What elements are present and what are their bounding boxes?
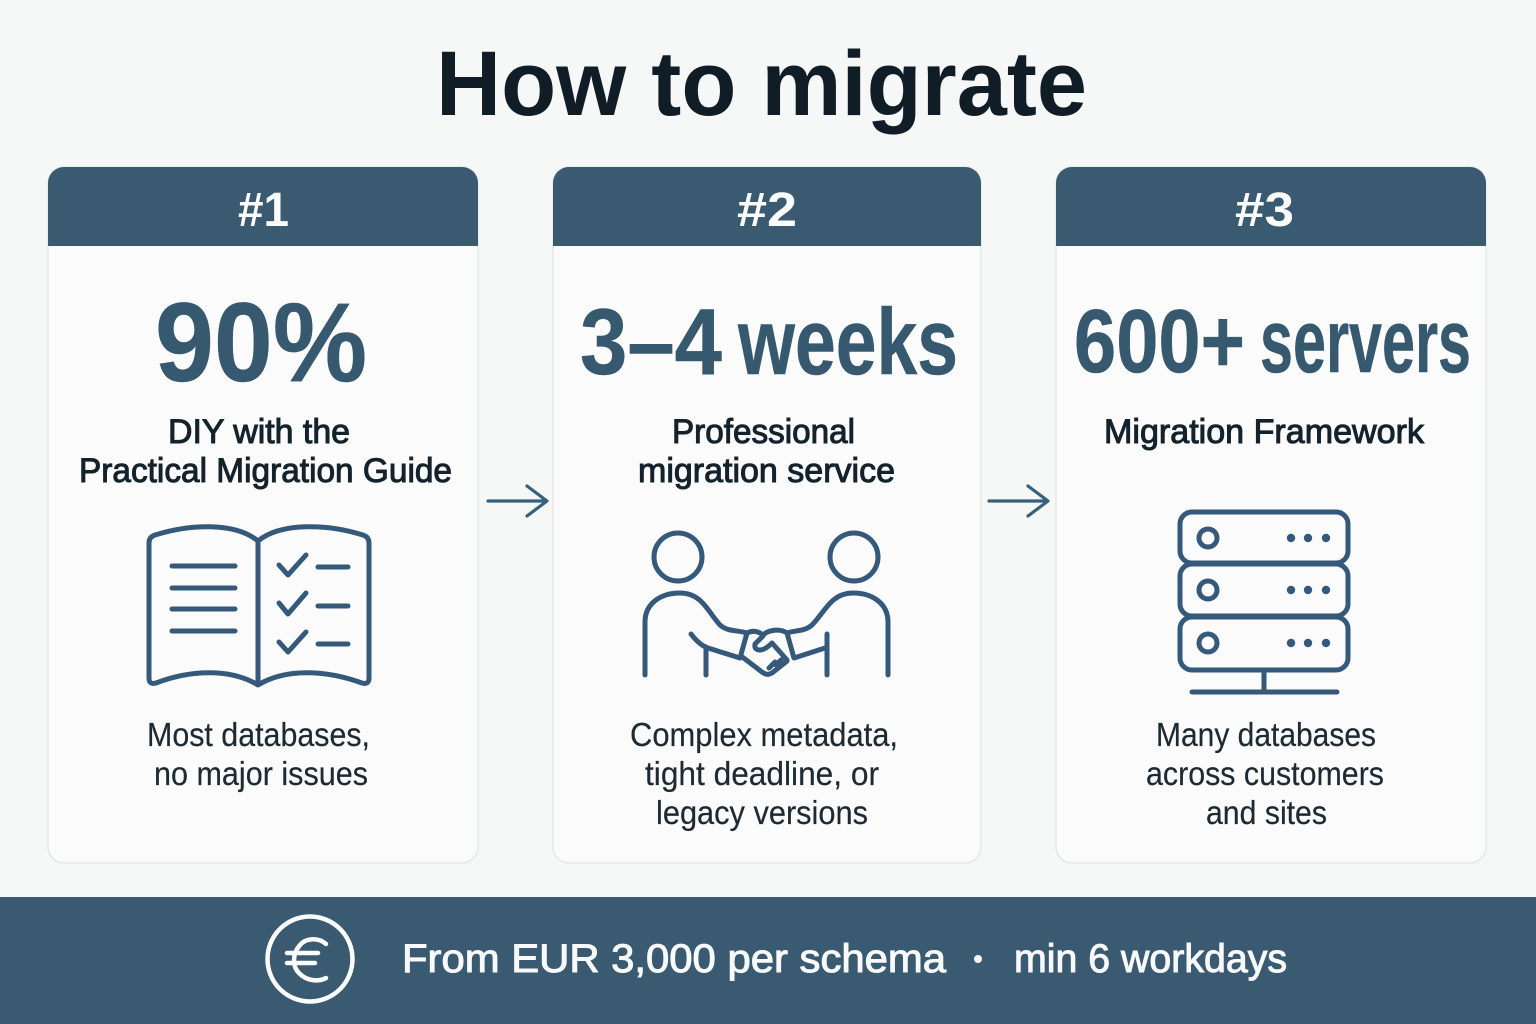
stat 3-4 weeks bbox=[580, 289, 958, 394]
title: How to migrate bbox=[436, 33, 1087, 135]
subtitle 2: Professional bbox=[672, 413, 855, 451]
header number 2: #2 bbox=[737, 184, 797, 237]
arrow 2 to 3 bbox=[989, 486, 1048, 516]
icon: server rack bbox=[1180, 512, 1348, 692]
subtitle 3: Migration Framework bbox=[1104, 413, 1425, 451]
header bar 2 bbox=[553, 167, 981, 246]
duration text: min 6 workdays bbox=[1014, 937, 1287, 981]
icon: open book with checklist bbox=[149, 527, 369, 685]
description 3: across customers bbox=[1146, 755, 1384, 792]
stat 3-4 weeks: 3–4 bbox=[580, 289, 722, 394]
description 1 bbox=[147, 716, 370, 792]
subtitle 2 bbox=[638, 413, 895, 490]
card background 3 bbox=[1056, 167, 1486, 863]
header bar 1 bbox=[48, 167, 478, 246]
header number 1: #1 bbox=[238, 184, 289, 237]
footer background bbox=[0, 897, 1536, 1024]
icon: handshake bbox=[645, 533, 888, 675]
stat 90%: 90% bbox=[155, 280, 367, 405]
description 2: Complex metadata, bbox=[630, 716, 898, 753]
icon: euro coin bbox=[268, 916, 352, 1002]
arrow 1 to 2 bbox=[488, 486, 547, 516]
panel: option 1 DIY bbox=[48, 167, 478, 863]
card background 1 bbox=[48, 167, 478, 863]
separator dot bbox=[974, 955, 982, 963]
description 1: no major issues bbox=[154, 755, 368, 792]
description 2: tight deadline, or bbox=[645, 755, 879, 792]
panel: option 3 framework bbox=[1056, 167, 1486, 863]
header bar 3 bbox=[1056, 167, 1486, 246]
subtitle 1 bbox=[79, 413, 452, 490]
stat 600+ servers bbox=[1074, 292, 1471, 392]
pricing text: From EUR 3,000 per schema bbox=[402, 937, 947, 981]
footer banner bbox=[0, 897, 1536, 1024]
description 2: legacy versions bbox=[656, 794, 868, 831]
description 2 bbox=[630, 716, 898, 831]
description 1: Most databases, bbox=[147, 716, 370, 753]
description 3: Many databases bbox=[1156, 716, 1376, 753]
subtitle 1: Practical Migration Guide bbox=[79, 452, 452, 490]
subtitle 2: migration service bbox=[638, 452, 895, 490]
stat 600+ servers: 600+ bbox=[1074, 292, 1245, 392]
header number 3: #3 bbox=[1235, 184, 1294, 237]
panel: option 2 professional service bbox=[553, 167, 981, 863]
description 3: and sites bbox=[1206, 794, 1327, 831]
subtitle 1: DIY with the bbox=[168, 413, 350, 451]
description 3 bbox=[1146, 716, 1384, 831]
stat 3-4 weeks: weeks bbox=[737, 289, 958, 394]
card background 2 bbox=[553, 167, 981, 863]
